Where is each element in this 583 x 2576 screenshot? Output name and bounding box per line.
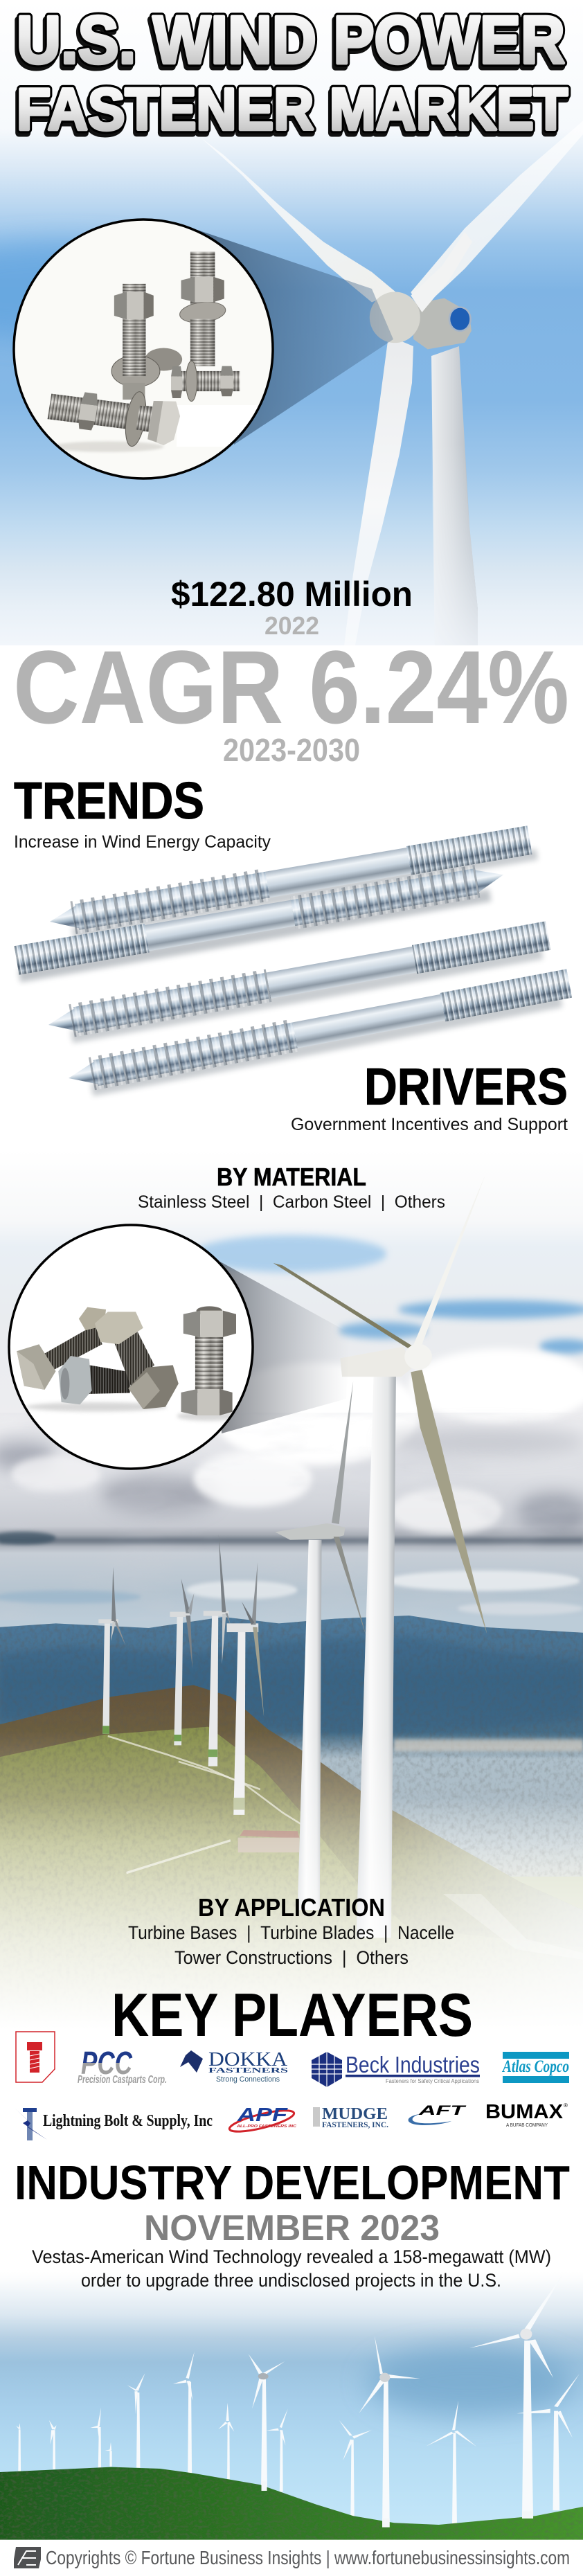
screw 4 — [66, 967, 573, 1100]
logo: PCC: Precision Castparts Corp. — [78, 2074, 167, 2086]
clouds and sky — [0, 1235, 583, 1535]
logo: Mudge Fasteners — [313, 2105, 388, 2129]
horizon cloud band — [0, 1532, 583, 1615]
logo: Dokka Fasteners — [180, 2048, 288, 2084]
heading: trends: TRENDS — [14, 771, 204, 830]
application segments line 2: Tower Constructions | Others — [174, 1947, 409, 1968]
callout cone to nacelle — [220, 1262, 350, 1433]
footer — [14, 2547, 570, 2568]
photo: threaded screws — [14, 823, 573, 1100]
turbine third — [204, 1535, 231, 1766]
trend text: Increase in Wind Energy Capacity — [14, 832, 271, 852]
towers in front of hill — [262, 2481, 533, 2528]
heading: by application: BY APPLICATION — [198, 1893, 385, 1922]
logo: Mudge Fasteners: MUDGE — [322, 2105, 388, 2123]
logo: Bumax: ® — [564, 2102, 568, 2109]
heading: key players: KEY PLAYERS — [111, 1980, 473, 2049]
panel: key players — [15, 1980, 569, 2140]
screw 1 — [47, 823, 538, 942]
development text line 1: Vestas-American Wind Technology revealed a 158-megawatt (MW) — [32, 2246, 551, 2267]
material segments: Stainless Steel | Carbon Steel | Others — [138, 1192, 445, 1212]
logo: Fortune Business Insights — [14, 2547, 41, 2568]
title line 2: FASTENER MARKET — [17, 77, 568, 143]
bolt: front lying — [47, 391, 180, 447]
callout circle: material photo — [9, 1225, 253, 1469]
title line 2: FASTENER MARKET — [17, 77, 568, 143]
panel: trends and drivers — [14, 771, 573, 1134]
logo: AFT: AFT — [418, 2104, 466, 2118]
turbine second — [170, 1578, 194, 1745]
logo: All-Pro Fasteners — [228, 2104, 297, 2136]
logo: All-Pro Fasteners: APF — [237, 2104, 288, 2125]
turbine large — [273, 1175, 487, 1938]
logo: All-Pro Fasteners: ALL-PRO FASTENERS INC — [236, 2125, 297, 2129]
logo: AFT — [409, 2104, 466, 2125]
bolt: upright right — [181, 1306, 236, 1415]
mountains — [0, 1616, 583, 1910]
bolt: horizontal rear — [171, 361, 240, 402]
bottom fade of photo — [0, 1731, 583, 2029]
bolt: front nut — [58, 1356, 130, 1404]
logo: Mudge Fasteners: FASTENERS, INC. — [322, 2120, 388, 2129]
logo: PCC — [78, 2045, 167, 2086]
logo: Beck Industries: Beck Industries — [346, 2052, 480, 2077]
title line 2: FASTENER MARKET — [15, 80, 566, 146]
panel: segmentation photo landscape — [0, 1150, 583, 2040]
logo: Atlas Copco — [501, 2052, 569, 2083]
turbine far left — [98, 1567, 126, 1734]
foreground hill — [0, 1685, 526, 1980]
by application block — [128, 1893, 454, 1968]
heading: by material: BY MATERIAL — [217, 1163, 366, 1191]
development text line 2: order to upgrade three undisclosed projects in the U.S. — [81, 2270, 501, 2291]
logo: Dokka Fasteners: Strong Connections — [216, 2075, 280, 2084]
turbine fourth — [227, 1562, 264, 1815]
panel: industry development — [15, 2156, 570, 2291]
logo: Beck Industries — [312, 2052, 480, 2087]
cloud texture — [118, 1413, 581, 1539]
callout cone to turbine — [197, 230, 393, 445]
logo: Lightning Bolt — [15, 2108, 213, 2140]
logo: PCC: PCC — [81, 2045, 133, 2081]
forecast period: 2023-2030 — [223, 732, 360, 768]
bolt: big diagonal — [95, 1312, 179, 1409]
panel: hero sky and market size — [0, 0, 583, 645]
driver text: Government Incentives and Support — [291, 1115, 568, 1134]
logo: Lightning Bolt: Lightning Bolt & Supply, Inc — [43, 2112, 213, 2130]
green hills — [0, 2467, 583, 2540]
date: NOVEMBER 2023 — [144, 2208, 440, 2248]
logo: Dokka Fasteners: FASTENERS — [208, 2066, 288, 2075]
screw 3 — [46, 919, 552, 1047]
bolt: front upright — [111, 284, 182, 400]
turbines behind hills — [16, 2273, 580, 2528]
turbine fifth — [275, 1381, 366, 1910]
application segments line 1: Turbine Bases | Turbine Blades | Nacelle — [128, 1922, 454, 1943]
logo: Dokka Fasteners: DOKKA — [208, 2048, 287, 2070]
logo: Bumax: A BUFAB COMPANY — [506, 2123, 548, 2128]
wind turbine hero — [201, 121, 583, 645]
screw 2 — [14, 860, 508, 983]
callout circle: fastener photo — [14, 220, 280, 478]
bolt: left lying — [17, 1307, 106, 1390]
by material block — [138, 1163, 445, 1212]
faded road — [443, 1894, 504, 1924]
logo: Bumax: BUMAX — [485, 2101, 564, 2123]
logo: Beck Industries: Fasteners for Safety Critical Applications — [386, 2078, 479, 2084]
base year: 2022 — [264, 611, 319, 640]
market size value: $122.80 Million — [171, 575, 413, 614]
logo: red bolt — [16, 2032, 55, 2082]
title — [15, 2, 568, 146]
photo: wind farm on green hills — [0, 2271, 583, 2540]
farm building — [238, 1830, 300, 1852]
small turbines row — [98, 1175, 487, 1938]
bolt: rear upright — [178, 252, 227, 366]
